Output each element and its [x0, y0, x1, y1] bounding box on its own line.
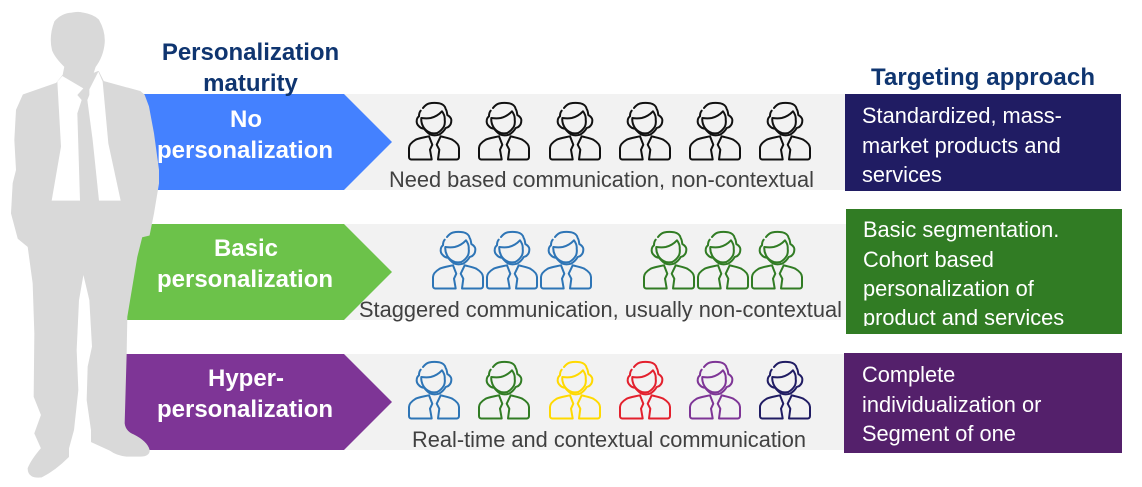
panel: basic segmentation targeting	[846, 209, 1122, 334]
panel: row 3 band	[344, 354, 846, 450]
arrow: no personalization	[126, 94, 392, 190]
icons: row 1 customers	[409, 103, 810, 160]
label: no personalization: personalization	[157, 137, 333, 164]
label: basic personalization: Basic	[214, 235, 278, 262]
label: hyper-personalization: personalization	[157, 396, 333, 423]
heading: personalization maturity: maturity	[203, 70, 298, 97]
caption: row 1: Need based communication, non-contextual	[389, 167, 814, 192]
panel: standardized targeting: market products and	[862, 133, 1061, 158]
icon: businessman silhouette	[12, 12, 158, 477]
arrow: basic personalization	[126, 224, 392, 320]
heading: targeting approach: Targeting approach	[871, 64, 1095, 91]
panel: row 2 band	[344, 224, 846, 320]
heading: personalization maturity: Personalization	[162, 39, 339, 66]
icons: row 2 green cohort	[644, 232, 802, 288]
panel: basic segmentation targeting: Basic segmentation.	[863, 217, 1059, 242]
panel: individualization targeting: individualization or	[862, 392, 1041, 417]
caption: row 3: Real-time and contextual communication	[412, 427, 806, 452]
panel: basic segmentation targeting: personalization of	[863, 276, 1035, 301]
arrow: hyper-personalization	[124, 354, 392, 450]
caption: row 2: Staggered communication, usually non-contextual	[359, 297, 842, 322]
panel: basic segmentation targeting: Cohort based	[863, 247, 994, 272]
icons: row 3 individual customers	[409, 362, 810, 418]
panel: standardized targeting	[845, 94, 1121, 191]
panel: individualization targeting	[844, 353, 1122, 453]
label: basic personalization: personalization	[157, 266, 333, 293]
panel: row 1 band	[344, 94, 846, 190]
label: no personalization: No	[230, 106, 262, 133]
label: hyper-personalization: Hyper-	[208, 365, 284, 392]
panel: standardized targeting: services	[862, 162, 942, 187]
icons: row 2 blue cohort	[433, 232, 591, 288]
panel: individualization targeting: Complete	[862, 362, 955, 387]
panel: basic segmentation targeting: product and services	[863, 305, 1064, 330]
panel: individualization targeting: Segment of one	[862, 421, 1016, 446]
panel: standardized targeting: Standardized, mass-	[862, 103, 1062, 128]
